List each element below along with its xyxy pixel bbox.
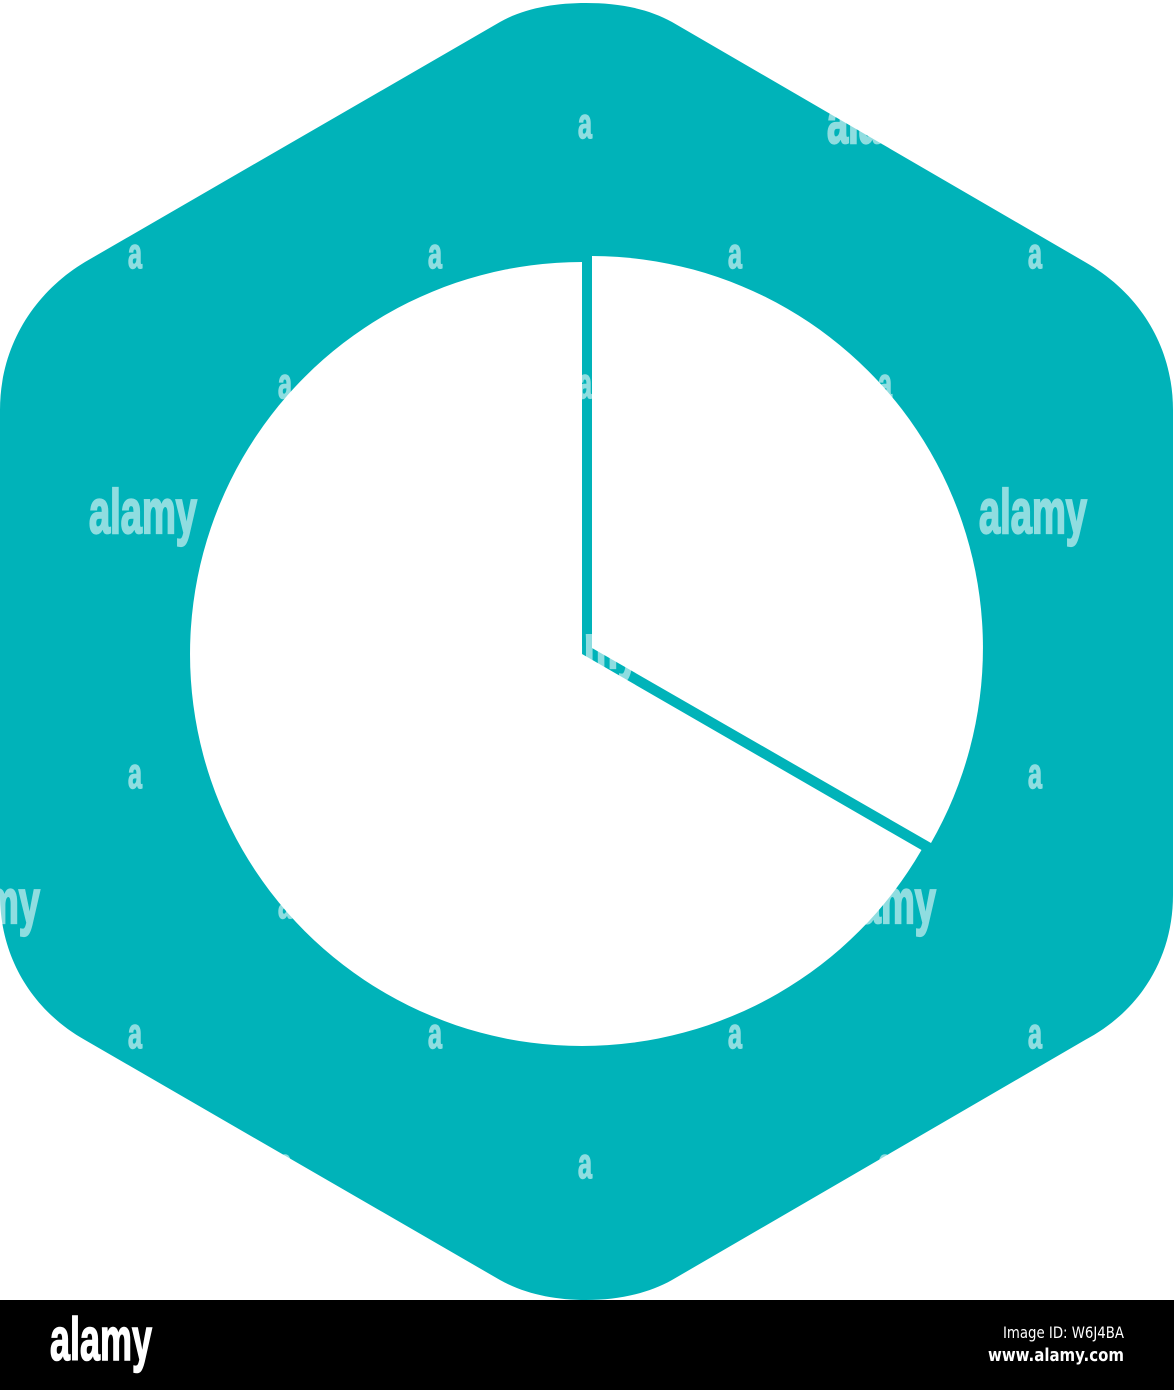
small watermark marks: a <box>278 880 293 928</box>
footer bar <box>0 1300 1174 1390</box>
small watermark marks: a <box>128 750 143 798</box>
small watermark marks: a <box>428 1010 443 1058</box>
small watermark marks: a <box>1028 750 1043 798</box>
small watermark marks: a <box>728 1010 743 1058</box>
watermark: lower right: alamy <box>828 868 936 937</box>
footer logo: alamy <box>50 1306 152 1373</box>
small watermark marks: a <box>1028 1010 1043 1058</box>
small watermark marks: a <box>728 230 743 278</box>
pie chart <box>190 256 983 1046</box>
small watermark marks: a <box>128 230 143 278</box>
watermark: centre: alamy <box>531 613 639 682</box>
small watermark marks: a <box>878 360 893 408</box>
small watermark marks: a <box>128 1010 143 1058</box>
small watermark marks: a <box>578 1140 593 1188</box>
pie slice: large segment <box>190 262 922 1046</box>
footer background <box>0 1300 1174 1390</box>
small watermark marks: a <box>878 1140 893 1188</box>
watermark: large right: alamy <box>979 478 1087 547</box>
watermark: large left: alamy <box>89 478 197 547</box>
watermarks on icon <box>0 88 1087 1188</box>
pie slice: small segment <box>592 256 983 843</box>
small watermark marks: a <box>1028 230 1043 278</box>
watermark: top clipped: alamy <box>827 88 935 157</box>
small watermark marks: a <box>278 1140 293 1188</box>
small watermark marks: a <box>428 230 443 278</box>
small watermark marks: a <box>578 100 593 148</box>
small watermark marks: a <box>278 360 293 408</box>
small watermark marks: a <box>578 360 593 408</box>
image id: Image ID: W6J4BA <box>1003 1323 1124 1342</box>
website: www.alamy.com <box>988 1345 1124 1366</box>
small watermark marks <box>128 100 1043 1188</box>
